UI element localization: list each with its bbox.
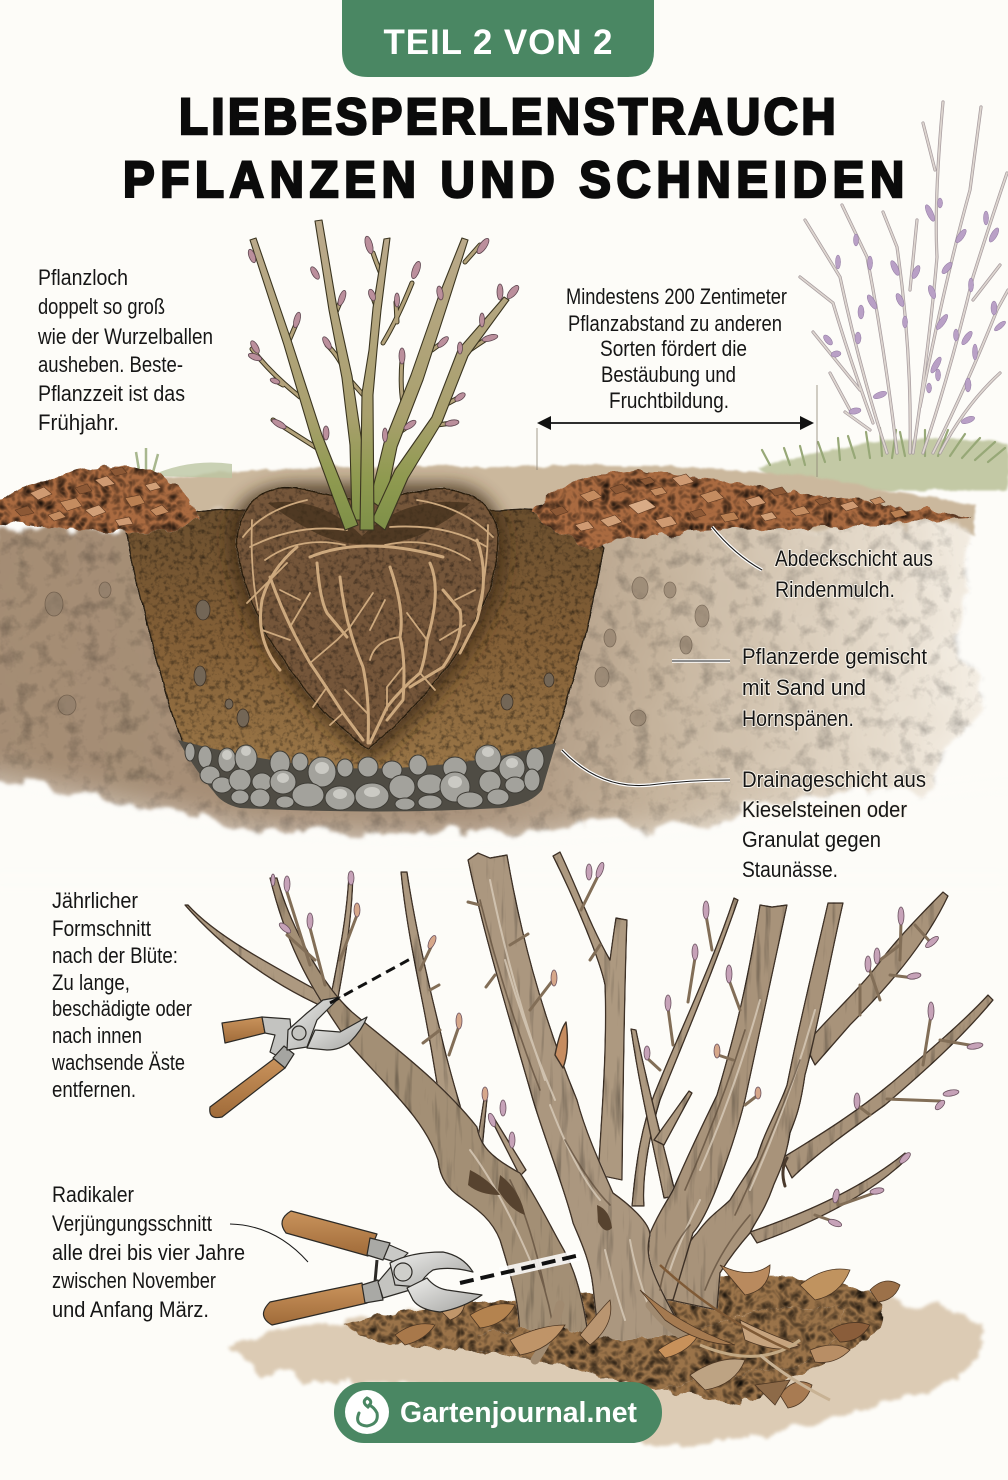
icon: large secateurs [263, 1211, 482, 1325]
soil grains [194, 600, 554, 727]
text: annual pruning: entfernen. [52, 1077, 136, 1102]
brand badge [334, 1382, 662, 1443]
pruned shrub [185, 852, 993, 1350]
surface roots [535, 1305, 690, 1360]
text: rejuvenation pruning: Verjüngungsschnitt [52, 1211, 212, 1236]
right mulch pile [532, 472, 970, 548]
label: drainage layer [562, 750, 926, 882]
leaf litter pile [345, 1275, 883, 1405]
label: mulch layer: Rindenmulch. [775, 577, 895, 602]
buds [271, 861, 983, 1228]
trunk knots and hollows [468, 1170, 612, 1230]
text: planting hole: Pflanzzeit ist das [38, 381, 185, 406]
branch collar [783, 1158, 787, 1186]
label: drainage layer: Kieselsteinen oder [742, 797, 907, 822]
bark shadows [480, 900, 800, 1340]
text: planting hole: wie der Wurzelballen [37, 324, 213, 349]
right trunks and branches [640, 892, 993, 1310]
root ball [237, 488, 498, 749]
foreground litter covering trunk bases [395, 1265, 900, 1408]
main stems [250, 220, 509, 530]
fine roots [243, 500, 493, 743]
title [123, 88, 904, 208]
text: planting distance: Pflanzabstand zu anderen [568, 311, 782, 336]
leaf litter wash on ground [230, 1275, 985, 1445]
label: planting soil: Hornspänen. [742, 706, 854, 731]
soil lower fade [0, 770, 1008, 880]
lavender buds [822, 198, 1007, 425]
young plant stems [247, 220, 521, 530]
bark highlights [470, 880, 815, 1320]
left trunk [270, 878, 590, 1350]
dark crown [268, 502, 470, 545]
text: rejuvenation pruning: alle drei bis vier Jahre [52, 1240, 245, 1265]
text: planting distance [566, 284, 787, 413]
text: planting hole: Frühjahr. [38, 410, 119, 435]
label: drainage layer: Granulat gegen [742, 827, 881, 852]
arrow: planting distance [537, 385, 817, 477]
title: LIEBESPERLENSTRAUCH [179, 88, 836, 145]
text: planting distance: Fruchtbildung. [609, 388, 729, 413]
label: planting soil: Pflanzerde gemischt [742, 644, 927, 669]
side twigs [287, 878, 975, 1222]
left mulch pile [0, 466, 200, 533]
header tab: TEIL 2 VON 2 [384, 23, 612, 62]
text: planting distance: Mindestens 200 Zentimeter [566, 284, 787, 309]
label: drainage layer: Drainageschicht aus [742, 767, 926, 792]
centre main trunk [468, 853, 695, 1350]
text: planting hole: doppelt so groß [38, 294, 165, 319]
text: planting distance: Bestäubung und [601, 362, 736, 387]
buds on stems [247, 235, 521, 442]
text: rejuvenation pruning: zwischen November [52, 1268, 216, 1293]
text: annual pruning [51, 888, 192, 1102]
logo icon [345, 1390, 389, 1434]
label: drainage layer: Staunässe. [742, 857, 838, 882]
text: planting hole: ausheben. Beste- [38, 352, 183, 377]
grass patch [758, 428, 1008, 490]
text: rejuvenation pruning: und Anfang März. [52, 1297, 209, 1322]
cut line: base pruning [460, 1255, 580, 1283]
text: annual pruning: Formschnitt [52, 916, 151, 941]
rear branches [185, 852, 738, 1206]
text: annual pruning: Zu lange, [52, 970, 130, 995]
icon: small secateurs [210, 997, 367, 1118]
text: annual pruning: beschädigte oder [52, 996, 192, 1021]
soil stones [45, 577, 709, 726]
label: planting soil [672, 644, 927, 731]
outer soil cross-section [0, 520, 985, 835]
side twigs [252, 245, 488, 450]
text: annual pruning: nach der Blüte: [52, 943, 178, 968]
text: planting distance: Sorten fördert die [600, 336, 747, 361]
cut line: crown pruning [330, 958, 412, 1003]
planting pit with planting soil [126, 490, 604, 785]
text: annual pruning: nach innen [52, 1023, 142, 1048]
fallen leaves [395, 1265, 900, 1408]
text: rejuvenation pruning: Radikaler [52, 1182, 134, 1207]
text: rejuvenation pruning [52, 1182, 245, 1322]
title: PFLANZEN UND SCHNEIDEN [123, 151, 904, 208]
label: mulch layer: Abdeckschicht aus [775, 546, 933, 571]
leader line: rejuvenation pruning [230, 1224, 308, 1262]
text: planting hole: Pflanzloch [38, 265, 128, 290]
text: annual pruning: wachsende Äste [51, 1050, 185, 1075]
ground horizon band [120, 448, 975, 535]
dark shadow around root ball [237, 490, 498, 751]
text: planting hole [37, 265, 213, 435]
brand badge: Gartenjournal.net [400, 1397, 637, 1429]
text: annual pruning: Jährlicher [52, 888, 138, 913]
label: mulch layer [712, 527, 933, 602]
illustration: neighbouring pale shrub [758, 102, 1008, 490]
header tab [342, 0, 654, 77]
drainage layer: gravel [178, 740, 556, 812]
label: planting soil: mit Sand und [742, 675, 866, 700]
cut stub [555, 1022, 567, 1068]
left grass tuft [136, 448, 232, 478]
